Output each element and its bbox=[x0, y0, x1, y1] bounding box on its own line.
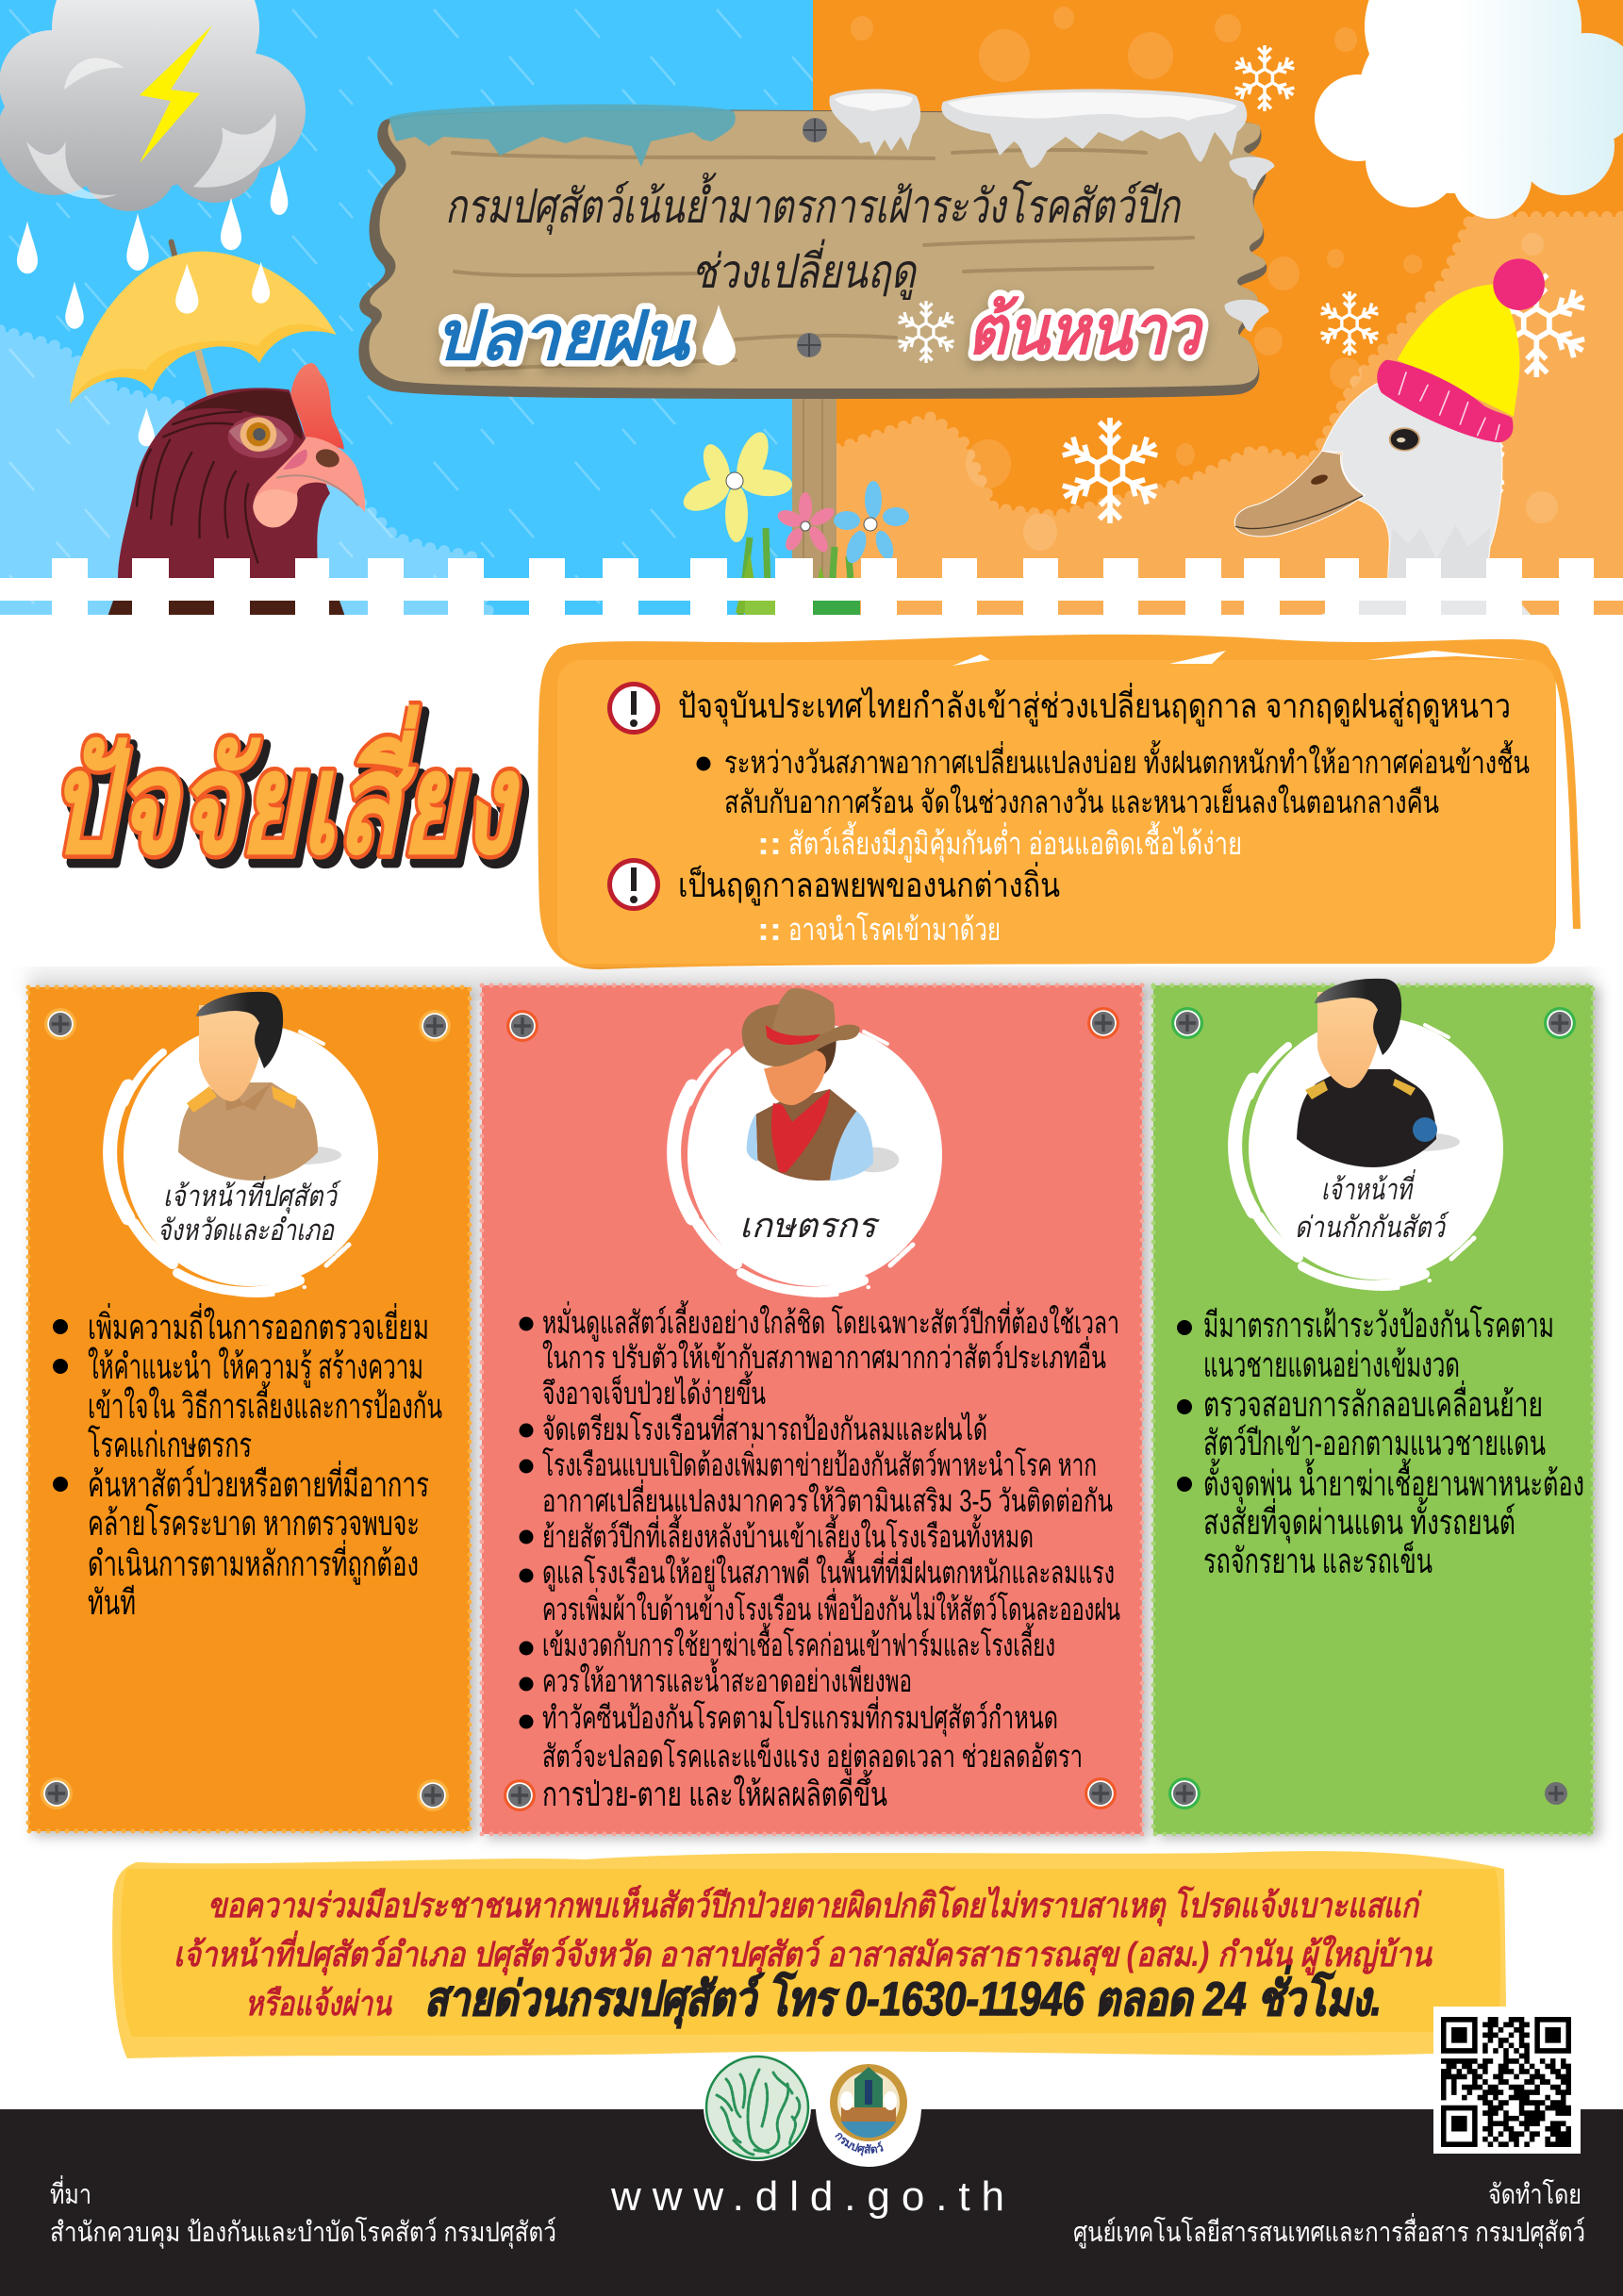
bullet list: การป่วย-ตาย และให้ผลผลิตดีขึ้น bbox=[542, 1769, 887, 1813]
panel: call to action bbox=[112, 1851, 1506, 2058]
bullet list: ดูแลโรงเรือนให้อยู่ในสภาพดี ในพื้นที่ที่มีฝนตกหนักและลมแรง bbox=[542, 1550, 1115, 1592]
label: start of cool season: ต้นหนาว bbox=[968, 293, 1204, 369]
duck base below fence bbox=[1316, 601, 1532, 617]
panel: quarantine officers bbox=[1153, 979, 1593, 1834]
website: www.dld.go.th bbox=[610, 2173, 1004, 2220]
officer in black uniform bbox=[1297, 979, 1460, 1167]
icon: warning 2 bbox=[607, 858, 660, 911]
white note 1 bbox=[757, 821, 1242, 863]
logo: royal seal green bbox=[704, 2054, 811, 2161]
bullet list: สัตว์จะปลอดโรคและแข็งแรง อยู่ตลอดเวลา ช่วยลดอัตรา bbox=[542, 1738, 1083, 1776]
request text: หรือแจ้งผ่าน bbox=[245, 1984, 392, 2023]
panel: farmers bbox=[482, 985, 1142, 1834]
farmer with cowboy hat bbox=[742, 988, 899, 1181]
bullet list: โรงเรือนแบบเปิดต้องเพิ่มตาข่ายป้องกันสัตว์พาหะนำโรค หาก bbox=[542, 1444, 1097, 1482]
risk statement 2: เป็นฤดูกาลอพยพของนกต่างถิ่น bbox=[678, 862, 1060, 906]
request text: เจ้าหน้าที่ปศุสัตว์อำเภอ ปศุสัตว์จังหวัด อาสาปศุสัตว์ อาสาสมัครสาธารณสุข (อสม.) กำนัน ผู้ใหญ่บ้าน bbox=[174, 1930, 1433, 1975]
shadow above panels bbox=[28, 969, 1594, 998]
icon: yellow umbrella bbox=[70, 242, 337, 446]
bullet list: ดำเนินการตามหลักการที่ถูกต้อง bbox=[88, 1539, 419, 1585]
screws bbox=[41, 1008, 451, 1811]
bullet list: ทำวัคซีนป้องกันโรคตามโปรแกรมที่กรมปศุสัตว์กำหนด bbox=[542, 1696, 1058, 1737]
label: end of rainy season: ปลายฝน bbox=[435, 299, 691, 374]
snowflake behind duck bbox=[1485, 271, 1588, 377]
sign screws bbox=[797, 118, 827, 357]
headline: ช่วงเปลี่ยนฤดู bbox=[691, 239, 918, 301]
bullet list: จัดเตรียมโรงเรือนที่สามารถป้องกันลมและฝนได้ bbox=[542, 1408, 987, 1446]
screws bbox=[504, 1007, 1119, 1811]
water puddle on sign bbox=[389, 105, 736, 167]
bullet list: ในการ ปรับตัวให้เข้ากับสภาพอากาศมากกว่าสัตว์ประเภทอื่น bbox=[542, 1336, 1106, 1375]
bullet list: ทันที bbox=[88, 1583, 136, 1622]
role caption bbox=[157, 1176, 341, 1247]
brush circle bbox=[674, 1024, 942, 1296]
rain drops bbox=[17, 165, 288, 329]
request text bbox=[174, 1885, 1433, 2023]
bullet list: เพิ่มความถี่ในการออกตรวจเยี่ยม bbox=[88, 1302, 429, 1346]
bullet list: คล้ายโรคระบาด หากตรวจพบจะ bbox=[88, 1503, 420, 1543]
icon: warning 1 bbox=[607, 682, 660, 735]
bullet detail bbox=[696, 740, 1530, 819]
source credit bbox=[50, 2175, 556, 2249]
bullet list: อากาศเปลี่ยนแปลงมากควรให้วิตามินเสริม 3-5 วันติดต่อกัน bbox=[542, 1479, 1113, 1518]
brush circle bbox=[1235, 1017, 1503, 1289]
producer credit: จัดทำโดย bbox=[1488, 2178, 1582, 2210]
white note 1: สัตว์เลี้ยงมีภูมิคุ้มกันต่ำ อ่อนแอติดเชื้อได้ง่าย bbox=[788, 821, 1242, 863]
bullet list: ควรเพิ่มผ้าใบด้านข้างโรงเรือน เพื่อป้องกันไม่ให้สัตว์โดนละอองฝน bbox=[542, 1588, 1120, 1627]
role caption bbox=[1295, 1169, 1449, 1244]
bullet list: เข้าใจใน วิธีการเลี้ยงและการป้องกัน bbox=[88, 1380, 442, 1426]
wooden post bbox=[792, 391, 836, 580]
bullet list: โรคแก่เกษตรกร bbox=[88, 1425, 252, 1464]
bullet list bbox=[1177, 1305, 1584, 1580]
icon: white drop bbox=[703, 305, 736, 365]
role caption: เจ้าหน้าที่ bbox=[1321, 1169, 1416, 1206]
duck with knitted hat bbox=[1234, 258, 1588, 578]
white note 2: :: bbox=[757, 912, 782, 947]
bullet list: ให้คำแนะนำ ให้ความรู้ สร้างความ bbox=[88, 1346, 423, 1388]
snowflakes bbox=[1059, 45, 1381, 523]
screws bbox=[1168, 1007, 1576, 1809]
bullet list: จึงอาจเจ็บป่วยได้ง่ายขึ้น bbox=[542, 1371, 766, 1411]
source credit: ที่มา bbox=[50, 2175, 91, 2210]
bullet list bbox=[519, 1300, 1120, 1813]
snow caps on sign bbox=[829, 89, 1273, 330]
logo: department of livestock bbox=[816, 2064, 921, 2167]
bullet list: ย้ายสัตว์ปีกที่เลี้ยงหลังบ้านเข้าเลี้ยงในโรงเรือนทั้งหมด bbox=[542, 1514, 1034, 1554]
brush circle bbox=[110, 1024, 378, 1296]
logo: department of livestock: กรมปศุสัตว์ bbox=[835, 2133, 883, 2156]
flowers and grass bbox=[679, 428, 909, 618]
role caption: เจ้าหน้าที่ปศุสัตว์ bbox=[163, 1176, 341, 1214]
panel: livestock officers bbox=[28, 987, 470, 1831]
role caption: ด่านกักกันสัตว์ bbox=[1295, 1211, 1449, 1244]
request text: ขอความร่วมมือประชาชนหากพบเห็นสัตว์ปีกป่วยตายผิดปกติโดยไม่ทราบสาเหตุ โปรดแจ้งเบาะแสแก่ bbox=[207, 1885, 1422, 1926]
risk factors title: ปัจจัยเสี่ยง bbox=[49, 704, 521, 883]
storm cloud bbox=[0, 0, 306, 211]
hotline: สายด่วนกรมปศุสัตว์ โทร 0-1630-11946 ตลอด 24 ชั่วโมง. bbox=[424, 1965, 1382, 2028]
bullet list: หมั่นดูแลสัตว์เลี้ยงอย่างใกล้ชิด โดยเฉพาะสัตว์ปีกที่ต้องใช้เวลา bbox=[542, 1300, 1119, 1342]
bullet list: ควรให้อาหารและน้ำสะอาดอย่างเพียงพอ bbox=[542, 1659, 912, 1698]
white page area bbox=[0, 615, 1623, 2123]
headline: กรมปศุสัตว์เน้นย้ำมาตรการเฝ้าระวังโรคสัตว์ปีก bbox=[445, 173, 1182, 236]
panel: risk factors bbox=[538, 635, 1581, 969]
headline bbox=[445, 173, 1182, 301]
risk factors title bbox=[49, 704, 526, 890]
QR code bbox=[1433, 2007, 1581, 2154]
role caption: เกษตรกร bbox=[739, 1206, 881, 1245]
risk factors title: ปัจจัยเสี่ยง bbox=[49, 704, 521, 883]
icon: snowflake on sign bbox=[896, 301, 956, 363]
bullet list: ค้นหาสัตว์ป่วยหรือตายที่มีอาการ bbox=[88, 1460, 429, 1504]
icon: lightning bolt bbox=[140, 25, 212, 163]
footer band bbox=[0, 2109, 1623, 2296]
white note 1: :: bbox=[757, 826, 782, 861]
wooden sign bbox=[364, 89, 1273, 393]
snow cloud bbox=[1315, 0, 1623, 219]
white note 2: อาจนำโรคเข้ามาด้วย bbox=[788, 912, 1001, 947]
officer in khaki uniform bbox=[178, 992, 341, 1181]
bullet list: แนวชายแดนอย่างเข้มงวด bbox=[1203, 1346, 1460, 1384]
source credit: สำนักควบคุม ป้องกันและบำบัดโรคสัตว์ กรมปศุสัตว์ bbox=[50, 2216, 556, 2249]
white note 2 bbox=[757, 912, 1001, 947]
white picket fence bbox=[0, 558, 1623, 617]
role caption: จังหวัดและอำเภอ bbox=[157, 1214, 335, 1247]
chicken bbox=[118, 363, 365, 578]
chicken base below fence bbox=[108, 601, 345, 617]
risk factors title: ปัจจัยเสี่ยง bbox=[55, 712, 526, 890]
bullet list: เข้มงวดกับการใช้ยาฆ่าเชื้อโรคก่อนเข้าฟาร์มและโรงเลี้ยง bbox=[542, 1623, 1055, 1662]
producer credit bbox=[1073, 2178, 1585, 2249]
bullet list: รถจักรยาน และรถเข็น bbox=[1203, 1539, 1433, 1580]
bullet list bbox=[53, 1302, 442, 1622]
